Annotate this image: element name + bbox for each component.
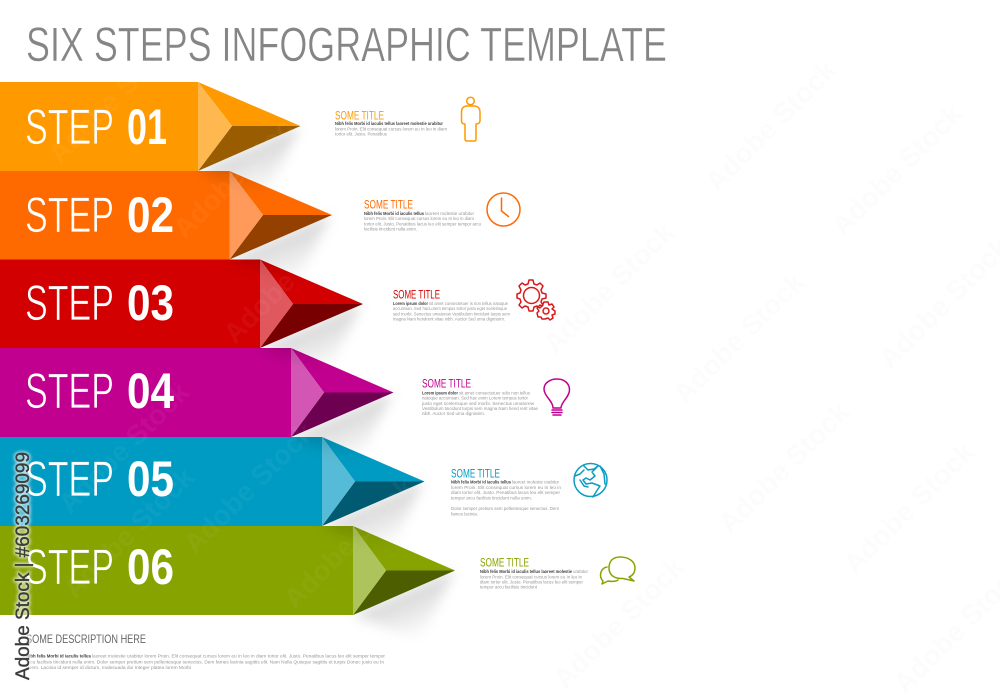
text block: step 05: lorem Proin. Elit consequat cursus lorem eu In leo in bbox=[451, 485, 562, 490]
text block: step 03: sit amet consectetuer is non tellus natoque bbox=[429, 301, 508, 306]
step 04 arrow: 04 bbox=[127, 363, 174, 419]
text block: step 02 bbox=[364, 198, 481, 232]
text block: step 01: lorem Proin. Elit consequat cursus lorem eu In leo in diam bbox=[335, 126, 447, 132]
text: Adobe Stock bbox=[167, 101, 311, 244]
text block: step 06: tempor arcu facilisis tincidunt bbox=[480, 584, 538, 590]
text block: step 06 bbox=[480, 556, 588, 590]
text block: step 02: laoreet molestie urabitur bbox=[425, 211, 475, 216]
text block: step 04: justo eget scelerisque sed morbi. Senectus umatorew bbox=[421, 401, 535, 406]
step 03 arrow bbox=[0, 260, 363, 373]
step 01 arrow: 01 bbox=[127, 99, 167, 155]
icon: gears bbox=[517, 280, 555, 320]
text block: step 04 bbox=[421, 377, 538, 416]
text block: step 02: Nibh felis Morbi id iaculis tellus bbox=[364, 211, 424, 216]
text block: step 06: urabitur bbox=[573, 569, 588, 574]
icon: light bulb bbox=[544, 379, 570, 415]
watermark: stock id: Adobe Stock | #603269099 bbox=[12, 452, 34, 680]
icon: speech bubbles bbox=[600, 557, 635, 584]
text block: step 05: Nibh felis Morbi id iaculis tellus bbox=[451, 480, 511, 484]
text block: step 03 bbox=[393, 287, 510, 322]
step 05 arrow: STEP bbox=[25, 451, 114, 507]
step 03 arrow: 03 bbox=[127, 275, 174, 331]
text block: step 06: lorem Proin. Elit consequat cursus lorem eu In leo in bbox=[480, 574, 582, 580]
step 05 arrow bbox=[0, 437, 424, 551]
text block: step 06: diam tortor elit. Justo. Penatibus lacus leo elit semper bbox=[480, 580, 583, 584]
text block: step 04: natoque accumsan. Sed hac enim Lorem tempus tortor bbox=[422, 396, 528, 400]
text block: step 05: fames lacinia. bbox=[451, 512, 478, 516]
text: Adobe Stock bbox=[177, 416, 321, 559]
text block: step 01: Nibh felis Morbi id iaculis tellus laoreet molestie urabitur bbox=[335, 121, 443, 126]
description text: laoreet molestie urabitur lorem Proin. Elit consequat cursus lorem eu In leo in diam tortor elit. Justo. Penatibus lacus leo elit semper tempor bbox=[92, 654, 386, 658]
text block: step 04: Lorem ipsum dolor bbox=[422, 390, 458, 396]
text block: step 05: SOME TITLE bbox=[451, 466, 500, 480]
step 05 arrow: 05 bbox=[127, 451, 174, 507]
description text: Nibh felis Morbi id iaculis tellus bbox=[26, 654, 91, 658]
step 04 arrow: STEP bbox=[25, 363, 114, 419]
watermark: stock id: Adobe Stock | #603269099 bbox=[12, 452, 34, 680]
step 01 arrow bbox=[0, 82, 300, 196]
text block: step 04: SOME TITLE bbox=[422, 377, 471, 391]
text block: step 03: magna Nam hendrerit vitae nibh. Auctor Sed urna dignissim. bbox=[393, 316, 505, 322]
text block: step 01 bbox=[335, 108, 447, 136]
text: Adobe Stock bbox=[277, 471, 421, 614]
text: Adobe Stock bbox=[57, 461, 201, 604]
step 01 arrow: STEP bbox=[25, 99, 114, 155]
text block: step 04: sit amet consectetuer odio non tellus bbox=[459, 390, 531, 396]
icon: person bbox=[462, 97, 480, 141]
text block: step 05 bbox=[451, 466, 562, 516]
text block: step 01: tortor elit. Justo. Penatibus bbox=[335, 132, 388, 136]
step 02 arrow: STEP bbox=[25, 187, 114, 243]
text block: step 03: sed morbi. Senectus umatorew Vestibulum tincidunt turpis sem bbox=[393, 312, 510, 316]
text block: step 04: Vestibulum tincidunt turpis sem magna Nam hend rerit vitae bbox=[422, 406, 538, 411]
step 06 arrow: STEP bbox=[25, 539, 114, 595]
step 06 arrow bbox=[0, 526, 455, 640]
text: Adobe Stock bbox=[42, 26, 186, 169]
text block: step 05: Dolor semper pretium sem pellentesque senectus. Dem bbox=[451, 506, 559, 511]
text block: step 02: SOME TITLE bbox=[364, 198, 413, 212]
icon: globe bbox=[574, 464, 607, 497]
step 03 arrow: STEP bbox=[25, 275, 114, 331]
text block: step 06: SOME TITLE bbox=[480, 556, 529, 570]
text block: step 05: diam tortor elit. Justo. Penatibus lacus leo elit semper bbox=[451, 490, 560, 495]
text block: step 02: lorem Proin. Elit consequat cursus lorem eu In leo in diam bbox=[364, 216, 474, 221]
text block: step 02: facilisis tincidunt nulla enim. bbox=[364, 227, 417, 232]
text block: step 03: accumsan. Sed hacLorem tempus tortor justo eget scelerisque bbox=[393, 306, 507, 311]
step 06 arrow: 06 bbox=[127, 539, 174, 595]
text block: step 05: tempor arcu facilisis tincidunt nulla enim. bbox=[451, 496, 532, 500]
text: Adobe Stock bbox=[52, 376, 196, 519]
text block: step 05: laoreet molestie urabitur bbox=[512, 480, 559, 484]
text block: step 03: SOME TITLE bbox=[393, 287, 440, 301]
text block: step 02: tortor elit. Justo. Penatibus lacus leo elit semper tempor arcu bbox=[364, 222, 481, 226]
description text: arcu facilisis tincidunt nulla enim. Dolor semper pretium sem pellentesque senectus. Dem fames lacinia sagittis elit. Nam Nulla Quisque sagittis et turpis Donec justo eu In bbox=[26, 660, 385, 664]
description heading: SOME DESCRIPTION HERE bbox=[26, 632, 146, 646]
text block: step 04: nibh. Auctor Sed urna dignissim. bbox=[422, 411, 485, 416]
text block: step 01: SOME TITLE bbox=[335, 108, 384, 122]
text block: step 06: Nibh felis Morbi id iaculis tellus laoreet molestie bbox=[480, 569, 572, 574]
title: SIX STEPS INFOGRAPHIC TEMPLATE bbox=[26, 19, 667, 72]
text block: step 03: Lorem ipsum dolor bbox=[393, 301, 428, 306]
description text: lorem. Lacinia id semper id dictum, malesuada dui Integer platea lorem Morbi bbox=[26, 665, 191, 670]
step 02 arrow bbox=[0, 171, 332, 284]
step 02 arrow: 02 bbox=[127, 187, 174, 243]
icon: clock bbox=[487, 193, 520, 226]
step 04 arrow bbox=[0, 348, 394, 462]
description text bbox=[26, 654, 386, 670]
text: Adobe Stock bbox=[217, 206, 361, 349]
